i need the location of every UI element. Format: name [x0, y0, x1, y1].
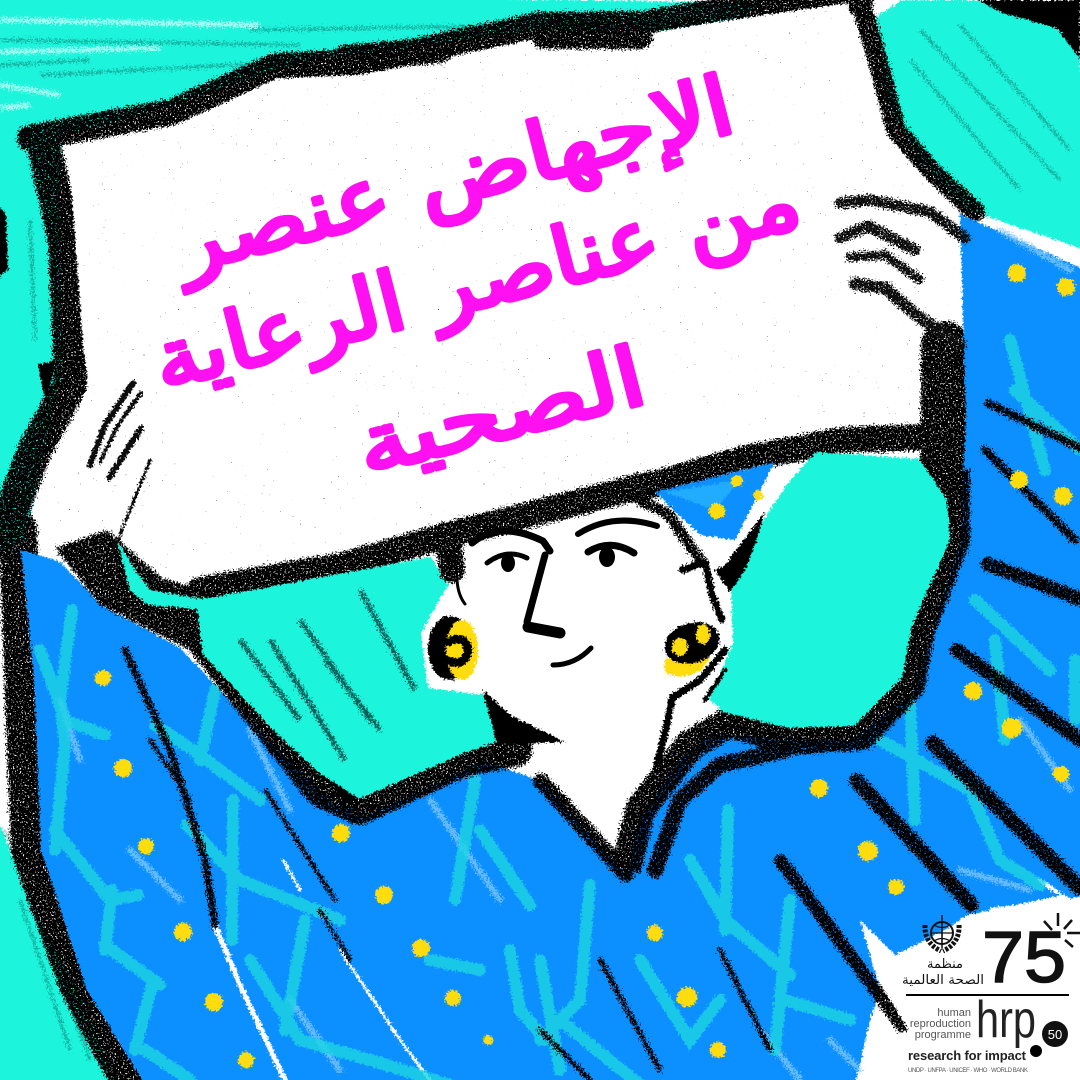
logo divider	[906, 994, 1069, 996]
paper speckle texture	[54, 11, 959, 579]
left earring	[428, 616, 478, 680]
logo area: white backing	[868, 895, 1080, 1080]
right hand: finger lines	[840, 200, 965, 345]
logo: research for impact: research for impact	[908, 1048, 1027, 1063]
face: eyes, brows, nose and mouth	[472, 521, 657, 665]
logo: hrp mark: hrp	[976, 991, 1036, 1049]
sign patches: black crayon over paper edge	[200, 36, 945, 590]
headline line 3: الصحية	[347, 329, 655, 494]
logo: WHO Arabic name	[902, 957, 984, 988]
logo: sponsor list: UNDP · UNFPA · UNICEF · WHO · WORLD BANK	[908, 1068, 1028, 1074]
logo: human reproduction programme	[910, 1007, 971, 1041]
logo: WHO 75 anniversary: 75	[982, 918, 1066, 998]
left hand: finger lines	[90, 383, 150, 560]
sign: white paper	[52, 3, 965, 585]
shirt: turquoise crosshatch pattern	[40, 340, 1080, 1080]
shirt: blue blouse and sleeves	[21, 214, 1080, 1080]
face: hair and jaw lines	[448, 500, 765, 765]
hair: left turquoise mass	[55, 530, 515, 808]
shirt: black fold lines	[125, 403, 1080, 1080]
hair: right turquoise mass	[626, 452, 955, 870]
logo: WHO Arabic name: الصحة العالمية	[902, 973, 984, 988]
logo: human reproduction programme: human	[937, 1007, 971, 1019]
logo: WHO emblem	[925, 915, 959, 951]
curtain white chalk flecks	[0, 20, 260, 108]
logo: human reproduction programme: programme	[915, 1029, 971, 1041]
logo: human reproduction programme: reproduction	[910, 1018, 971, 1030]
shirt: white chalk streaks	[215, 860, 1075, 1080]
headline line 2: من عناصر الرعاية	[143, 152, 810, 410]
shirt: yellow polka dots	[95, 264, 1075, 1068]
background: blue patch behind head	[655, 462, 775, 540]
right earring	[660, 616, 724, 682]
logo: WHO Arabic name: منظمة	[927, 957, 963, 972]
headline line 1: الإجهاض عنصر	[161, 58, 743, 295]
logo: hrp mark: 50	[1048, 1027, 1062, 1042]
sign headline: Arabic text in magenta	[143, 58, 810, 494]
